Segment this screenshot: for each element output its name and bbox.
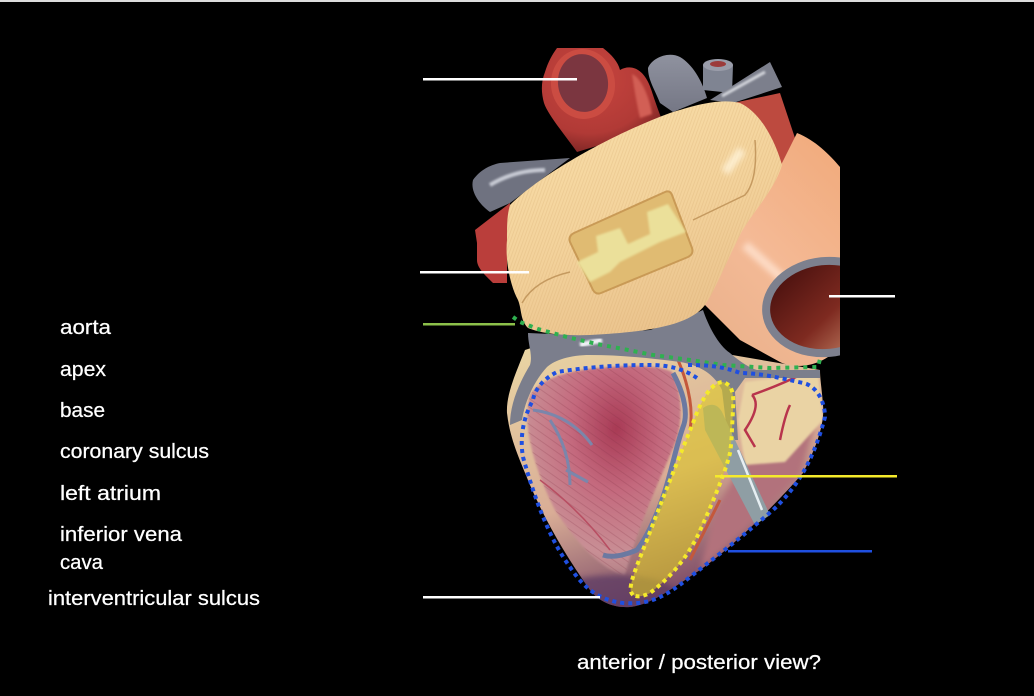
apex shading bbox=[580, 572, 674, 608]
left red vessels bbox=[475, 203, 510, 283]
muscle of right ventricle bbox=[700, 425, 815, 570]
term: base: base bbox=[60, 399, 105, 422]
capsule highlight bbox=[725, 150, 742, 172]
question: view: anterior / posterior view? bbox=[577, 651, 821, 674]
heart model photo bbox=[472, 48, 840, 608]
muscle of the left ventricle bbox=[527, 366, 681, 575]
label line: yellow bbox=[715, 475, 897, 478]
left grey vessel bbox=[472, 158, 570, 212]
blue dotted outline: ventricles bbox=[522, 365, 825, 603]
term: left atrium: left atrium bbox=[60, 482, 161, 505]
label line: middle white bbox=[420, 271, 529, 274]
vessel highlight bbox=[580, 340, 602, 345]
label line: lower white bbox=[423, 596, 600, 598]
yellow dotted outline: interventricular sulcus bbox=[631, 382, 733, 596]
clear latch window bbox=[570, 191, 692, 294]
cream capsule bbox=[507, 101, 782, 335]
label line: blue bbox=[728, 550, 872, 552]
top edge strip bbox=[0, 0, 1034, 2]
word bank bbox=[48, 316, 260, 610]
term: inferior vena cava: cava bbox=[60, 551, 104, 574]
atrium highlight bbox=[745, 245, 790, 285]
term: aorta: aorta bbox=[60, 316, 112, 339]
label line: green bbox=[423, 323, 515, 326]
term: inferior vena cava bbox=[60, 523, 183, 574]
grey coronary vessels beneath the cap bbox=[510, 310, 820, 440]
term: interventricular sulcus: interventricular sulcus bbox=[48, 587, 260, 610]
yellow overlay on the interventricular sulcus bbox=[631, 382, 733, 596]
ventricles bbox=[507, 345, 823, 615]
green dotted outline: coronary sulcus bbox=[513, 317, 820, 368]
label line: right white bbox=[829, 295, 895, 298]
term: apex: apex bbox=[60, 358, 107, 381]
peach atrium bbox=[703, 133, 840, 366]
grey vessels at top bbox=[648, 55, 782, 112]
term: inferior vena cava: inferior vena bbox=[60, 523, 183, 546]
term: coronary sulcus: coronary sulcus bbox=[60, 440, 209, 463]
pulmonary vessel, red, right bbox=[736, 93, 795, 164]
coronary arteries and veins bbox=[745, 375, 800, 447]
aortic arch (red vessel) bbox=[542, 45, 662, 152]
latch pieces bbox=[577, 204, 686, 282]
capsule seam bbox=[522, 140, 756, 303]
venous opening with grey ring bbox=[762, 256, 840, 358]
glass probe bbox=[703, 405, 770, 525]
label line: upper white bbox=[423, 78, 577, 80]
